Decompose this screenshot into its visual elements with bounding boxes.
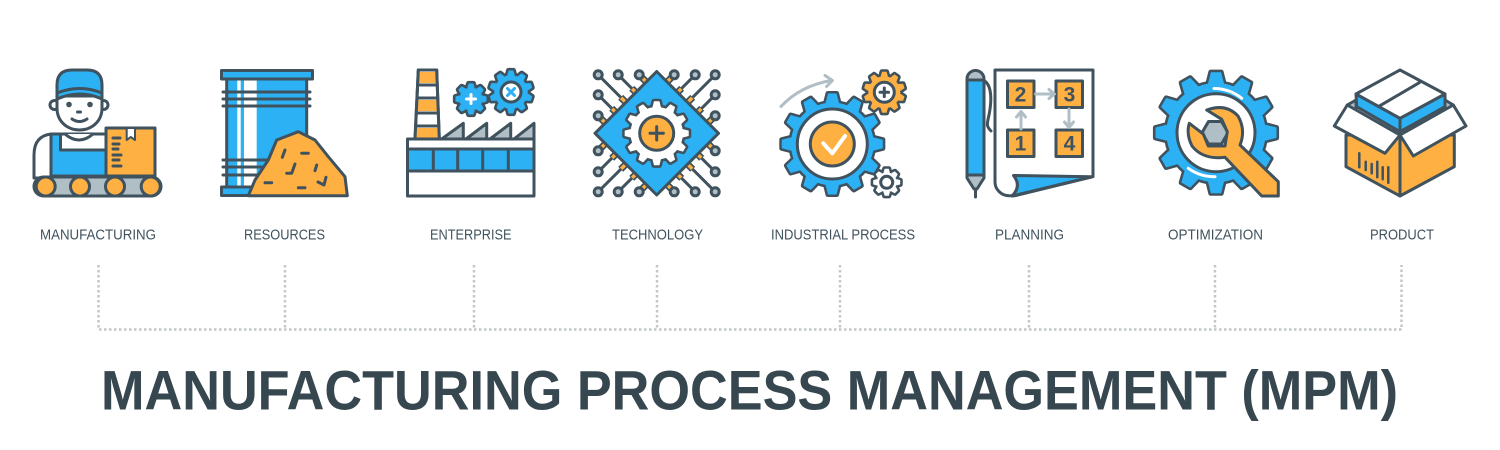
label: industrial process: INDUSTRIAL PROCESS bbox=[771, 226, 915, 244]
label: optimization: OPTIMIZATION bbox=[1168, 226, 1263, 244]
label: enterprise: ENTERPRISE bbox=[430, 226, 512, 244]
icon: planning pen and flowchart sheet: 3 bbox=[1064, 84, 1075, 106]
icon: product open box bbox=[1334, 70, 1466, 196]
icon: industrial process gears bbox=[781, 72, 905, 196]
dotted connector bracket bbox=[98, 265, 1402, 330]
title: MANUFACTURING PROCESS MANAGEMENT (MPM) bbox=[101, 358, 1398, 422]
icon: planning pen and flowchart sheet: 2 bbox=[1015, 84, 1026, 106]
icon: technology chip bbox=[594, 71, 719, 196]
icon: resources barrel and pile bbox=[222, 70, 347, 196]
label: manufacturing: MANUFACTURING bbox=[40, 226, 156, 244]
label: resources: RESOURCES bbox=[244, 226, 325, 244]
label: planning: PLANNING bbox=[995, 226, 1064, 244]
icon: planning pen and flowchart sheet bbox=[967, 70, 1093, 197]
icon: optimization gear and wrench bbox=[1156, 72, 1278, 196]
icon: planning pen and flowchart sheet: 4 bbox=[1064, 132, 1076, 156]
label: product: PRODUCT bbox=[1370, 226, 1434, 244]
icon: enterprise factory with gears bbox=[408, 70, 534, 196]
icon: planning pen and flowchart sheet: 1 bbox=[1015, 132, 1027, 156]
label: technology: TECHNOLOGY bbox=[612, 226, 703, 244]
icon: manufacturing worker on conveyor bbox=[34, 70, 161, 196]
